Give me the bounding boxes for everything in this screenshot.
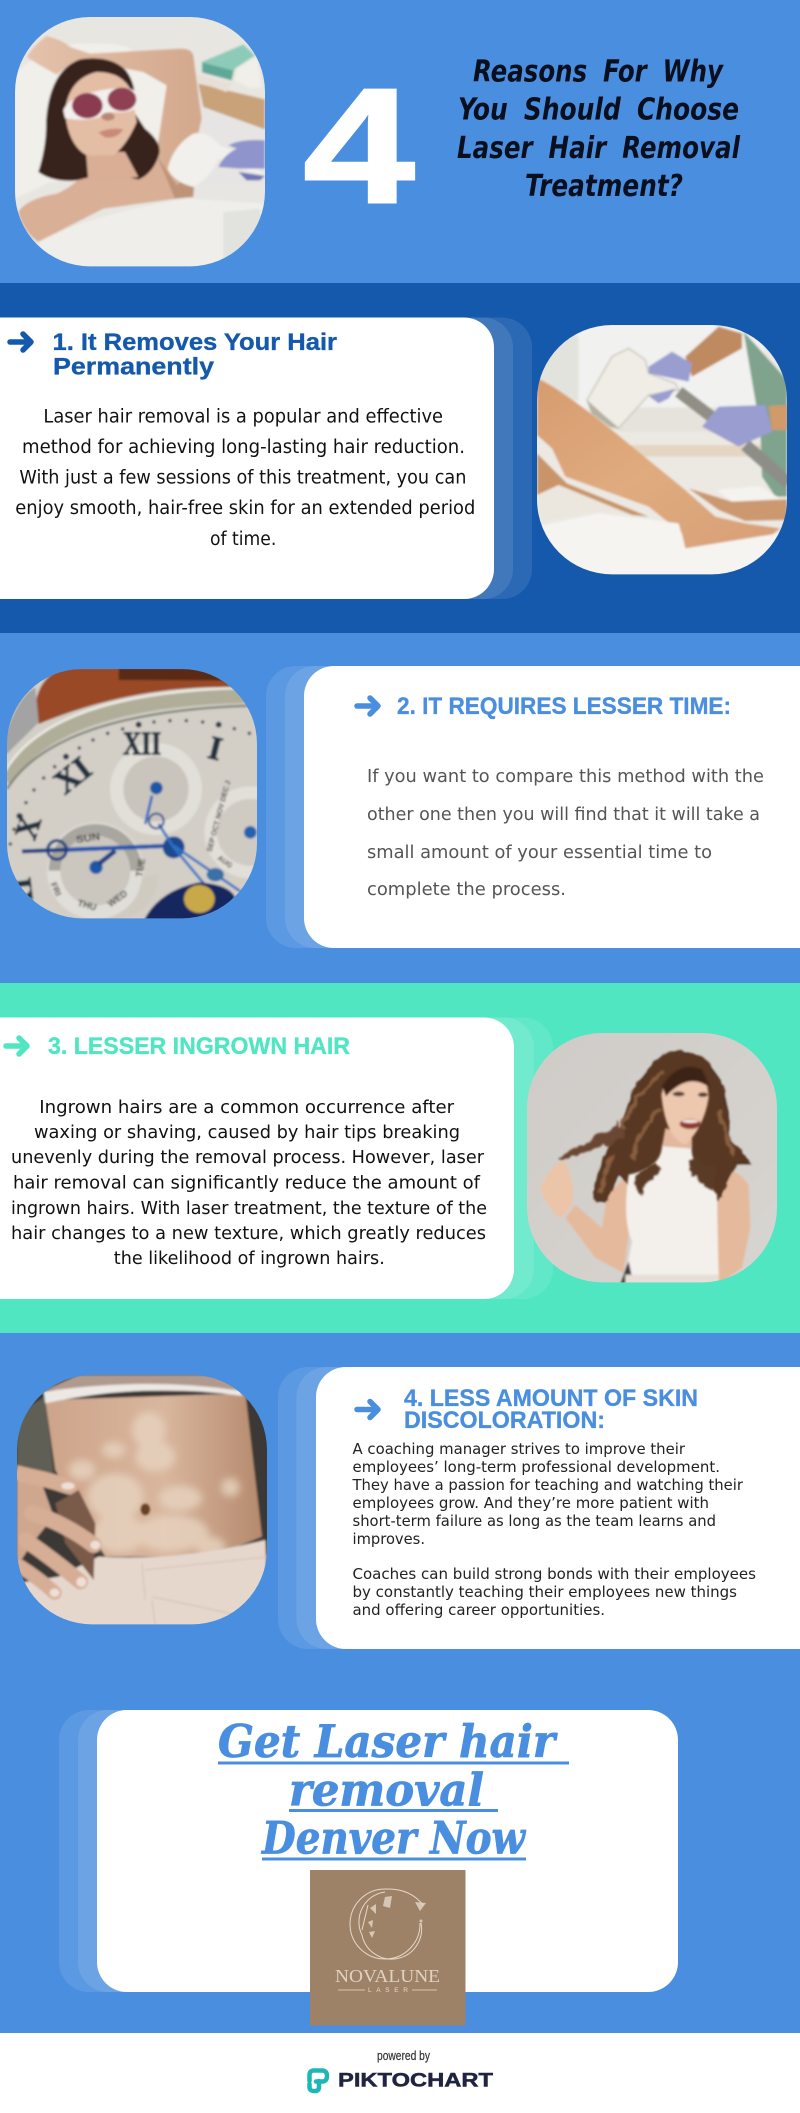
panel: reason 2 card bbox=[266, 666, 800, 948]
photo: watch dial: I bbox=[204, 729, 226, 768]
photo: woman receiving underarm laser treatment bbox=[10, 12, 270, 272]
text block: reason 4 body: employees grow. And they’re more patient with bbox=[352, 1494, 709, 1512]
heading: reason 4: 4. LESS AMOUNT OF SKIN bbox=[404, 1385, 698, 1412]
text block: reason 3 body: hair removal can significantly reduce the amount of bbox=[13, 1172, 481, 1194]
footer background bbox=[0, 2033, 800, 2113]
photo: watch dial: AUG bbox=[216, 853, 235, 870]
text block: reason 2 body: If you want to compare this method with the bbox=[367, 766, 764, 787]
call to action text: Denver Now bbox=[260, 1812, 527, 1864]
heading: reason 1: 1. It Removes Your Hair bbox=[52, 329, 337, 356]
text block: reason 1 body: With just a few sessions of this treatment, you can bbox=[19, 468, 466, 488]
call to action text: Get Laser hair bbox=[218, 1715, 558, 1768]
text block: reason 1 body bbox=[15, 406, 475, 550]
logo: Novalune Laser bbox=[310, 1870, 466, 2026]
photo: watch dial bbox=[7, 669, 257, 918]
section 4 and call to action background bbox=[0, 1333, 800, 2033]
photo: watch dial: XI bbox=[2, 876, 41, 915]
heading: reason 2: 2. IT REQUIRES LESSER TIME: bbox=[397, 693, 731, 720]
title: Laser Hair Removal bbox=[457, 131, 741, 166]
icon: arrow bbox=[6, 1038, 27, 1054]
text block: reason 1 body: enjoy smooth, hair-free skin for an extended period bbox=[15, 498, 475, 519]
call to action text bbox=[218, 1715, 569, 1864]
section 3 background bbox=[0, 983, 800, 1333]
text block: reason 1 body: method for achieving long-lasting hair reduction. bbox=[22, 437, 465, 458]
icon: arrow bbox=[357, 698, 378, 714]
text block: reason 2 body bbox=[367, 766, 764, 900]
photo: watch dial: XI bbox=[47, 750, 99, 802]
photo: abdomen with skin discoloration bbox=[12, 1370, 272, 1630]
big number 4: 4 bbox=[303, 54, 415, 238]
panel: reason 1 card bbox=[0, 318, 532, 599]
text block: reason 4 body: They have a passion for teaching and watching their bbox=[352, 1476, 744, 1494]
call to action text: removal bbox=[289, 1764, 484, 1816]
title: Reasons For Why bbox=[473, 54, 724, 90]
footer: powered by Piktochart: PIKTOCHART bbox=[338, 2070, 493, 2092]
text block: reason 3 body: the likelihood of ingrown hairs. bbox=[114, 1248, 385, 1269]
section 2 background bbox=[0, 633, 800, 983]
logo: Novalune Laser: NOVALUNE bbox=[335, 1966, 440, 1986]
text block: reason 2 body: complete the process. bbox=[367, 879, 566, 900]
photo: watch dial: TUE bbox=[134, 858, 147, 878]
photo: watch dial: X bbox=[8, 811, 48, 844]
icon: arrow bbox=[357, 1402, 378, 1418]
photo: watch dial: SEP OCT NOV DEC J bbox=[205, 779, 232, 853]
footer: powered by Piktochart bbox=[310, 2048, 493, 2092]
photo: watch dial: WED bbox=[106, 888, 130, 909]
text block: reason 4 body: short-term failure as long as the team learns and bbox=[352, 1512, 716, 1530]
photo: watch dial: THU bbox=[76, 898, 98, 913]
title: Treatment? bbox=[525, 169, 683, 204]
text block: reason 4 body: by constantly teaching their employees new things bbox=[352, 1583, 737, 1601]
footer: powered by Piktochart: powered by bbox=[377, 2048, 430, 2063]
heading: reason 4 bbox=[404, 1385, 698, 1434]
text block: reason 2 body: small amount of your essential time to bbox=[367, 842, 712, 863]
text block: reason 3 body: hair changes to a new texture, which greatly reduces bbox=[11, 1223, 486, 1244]
heading: reason 3: 3. LESSER INGROWN HAIR bbox=[48, 1033, 350, 1060]
text block: reason 1 body: Laser hair removal is a popular and effective bbox=[43, 406, 443, 428]
text block: reason 1 body: of time. bbox=[210, 529, 276, 550]
photo: watch dial: XII bbox=[123, 726, 161, 763]
title bbox=[457, 54, 741, 204]
panel: reason 4 card bbox=[278, 1367, 800, 1649]
text block: reason 3 body: ingrown hairs. With laser treatment, the texture of the bbox=[11, 1198, 487, 1219]
photo: watch dial: FRI bbox=[49, 881, 63, 897]
text block: reason 3 body bbox=[11, 1097, 487, 1269]
text block: reason 4 body bbox=[352, 1440, 756, 1619]
heading: reason 4: DISCOLORATION: bbox=[404, 1407, 605, 1434]
text block: reason 3 body: Ingrown hairs are a common occurrence after bbox=[39, 1097, 455, 1118]
text block: reason 4 body: Coaches can build strong bonds with their employees bbox=[352, 1565, 756, 1583]
panel: reason 3 card bbox=[0, 1018, 553, 1299]
text block: reason 4 body: improves. bbox=[352, 1530, 425, 1548]
photo: watch dial: SUN bbox=[76, 832, 101, 846]
panel: call to action card bbox=[59, 1710, 678, 1992]
text block: reason 2 body: other one then you will find that it will take a bbox=[367, 804, 760, 825]
text block: reason 4 body: A coaching manager strives to improve their bbox=[352, 1440, 686, 1458]
photo: woman with curly hair bbox=[522, 1028, 782, 1288]
text block: reason 3 body: waxing or shaving, caused by hair tips breaking bbox=[34, 1122, 460, 1143]
text block: reason 3 body: unevenly during the removal process. However, laser bbox=[11, 1147, 485, 1168]
icon: arrow bbox=[10, 334, 31, 350]
header background bbox=[0, 0, 800, 283]
text block: reason 4 body: employees’ long-term professional development. bbox=[352, 1458, 720, 1476]
title: You Should Choose bbox=[458, 92, 739, 128]
photo: laser handpiece on a leg bbox=[532, 320, 792, 580]
section 1 background bbox=[0, 283, 800, 633]
text block: reason 4 body: and offering career opportunities. bbox=[352, 1601, 605, 1619]
icon: Piktochart mark bbox=[310, 2070, 327, 2091]
heading: reason 1 bbox=[52, 329, 337, 380]
logo: Novalune Laser: LASER bbox=[368, 1987, 408, 1994]
heading: reason 1: Permanently bbox=[53, 354, 214, 380]
